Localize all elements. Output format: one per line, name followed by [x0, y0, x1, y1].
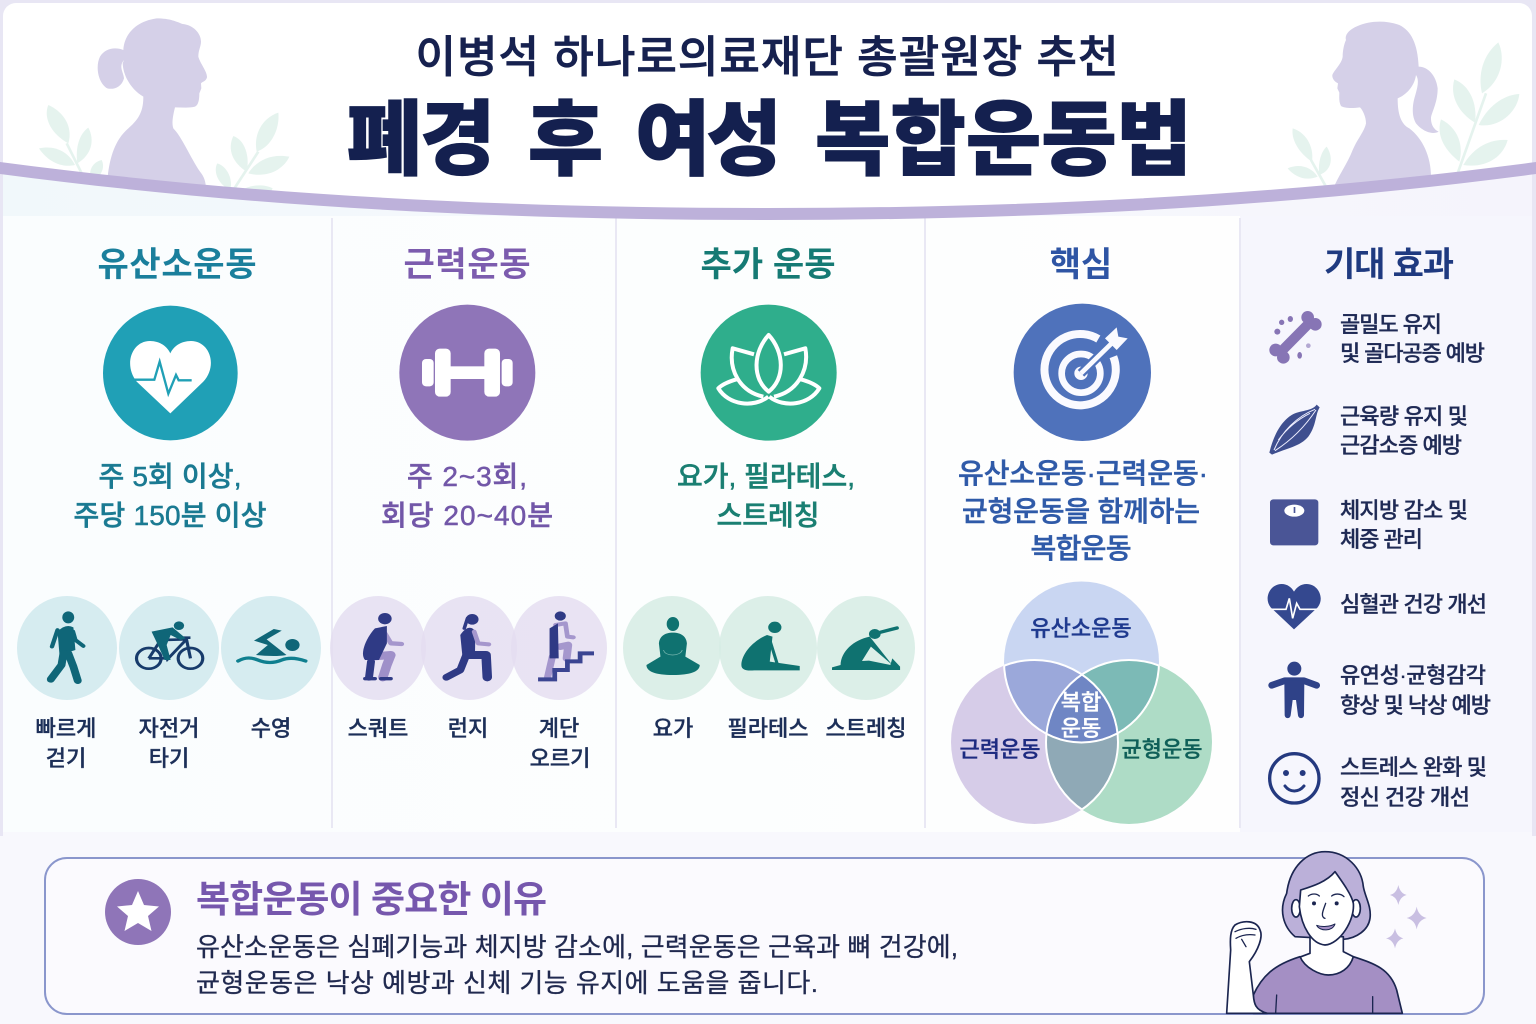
frequency text: [74, 461, 266, 531]
activity: brisk walking: 빠르게: [36, 716, 96, 741]
main title: 여성: [635, 95, 782, 186]
activity: lunge: [446, 614, 489, 741]
activity: brisk walking: [17, 596, 117, 771]
activity: stair climbing: [530, 611, 594, 771]
activity: cycling: 자전거: [139, 716, 199, 741]
venn diagram: [951, 582, 1212, 824]
frequency text: 주 2~3회,: [407, 461, 527, 492]
description text: 유산소운동·근력운동·: [958, 458, 1208, 489]
icon: target with arrow: [1014, 304, 1151, 441]
heading: strength: 근력운동: [404, 246, 530, 284]
venn diagram: 균형운동: [1122, 737, 1202, 762]
effect: muscle mass: 근감소증 예방: [1340, 433, 1462, 458]
effect: balance: 유연성·균형감각: [1340, 663, 1486, 688]
activity: pilates: [728, 622, 808, 741]
main title: 폐경: [346, 95, 496, 186]
callout body: [196, 932, 958, 998]
description text: 균형운동을 함께하는: [962, 496, 1200, 527]
icon: heart with pulse: [103, 306, 238, 440]
activity: stair climbing: 오르기: [530, 746, 590, 771]
activity circles: [623, 596, 915, 700]
icon: dumbbell: [399, 305, 535, 441]
activity: yoga: 요가: [653, 716, 693, 741]
callout body: 유산소운동은 심폐기능과 체지방 감소에, 근력운동은 근육과 뼈 건강에,: [196, 932, 958, 962]
activity: swimming: [221, 596, 321, 741]
activity: stretching: 스트레칭: [826, 716, 906, 741]
activity: swimming: 수영: [251, 716, 291, 741]
venn diagram: 유산소운동: [1030, 616, 1132, 641]
panel: strength exercise: [330, 246, 607, 771]
description text: 요가, 필라테스,: [677, 461, 855, 492]
heading: expected effects: 기대 효과: [1324, 246, 1454, 284]
activity: pilates: 필라테스: [728, 716, 808, 741]
effect: cardiovascular: 심혈관 건강 개선: [1340, 592, 1487, 617]
activity: cycling: [119, 596, 219, 771]
activity: cycling: 타기: [149, 746, 189, 771]
frequency text: [381, 461, 553, 531]
callout heading: 복합운동이 중요한 이유: [196, 879, 547, 920]
activity circles: [330, 596, 607, 700]
activity: squat: 스쿼트: [348, 716, 408, 741]
main title: 후: [528, 95, 603, 186]
icon: star badge: [105, 879, 171, 945]
icon: lotus: [701, 305, 837, 441]
frequency text: 주당 150분 이상: [74, 500, 266, 531]
frequency text: 주 5회 이상,: [98, 461, 242, 492]
callout body: 균형운동은 낙상 예방과 신체 기능 유지에 도움을 줍니다.: [196, 968, 818, 998]
activity: lunge: 런지: [448, 716, 488, 741]
panel: core: [951, 246, 1212, 824]
main title: [346, 95, 1192, 186]
main title: 복합운동법: [815, 95, 1192, 186]
effect: balance: 향상 및 낙상 예방: [1340, 693, 1491, 718]
effect: stress: [1270, 754, 1487, 810]
heading: aerobic: 유산소운동: [98, 246, 256, 284]
effect: cardiovascular: [1268, 584, 1487, 629]
heading: core: 핵심: [1050, 246, 1112, 284]
activity: stair climbing: 계단: [539, 716, 579, 741]
effect: bone density: 골밀도 유지: [1340, 312, 1442, 337]
venn diagram: 근력운동: [960, 737, 1040, 762]
effect: stress: 스트레스 완화 및: [1340, 755, 1487, 780]
panel: aerobic exercise: [17, 246, 321, 771]
venn diagram: 운동: [1061, 716, 1101, 741]
activity: yoga: [646, 617, 700, 741]
description text: 복합운동: [1030, 533, 1132, 564]
effect: muscle mass: 근육량 유지 및: [1340, 404, 1468, 429]
effect: muscle mass: [1269, 404, 1468, 458]
panel: expected effects: [1268, 246, 1491, 810]
callout: why combined exercise matters: [45, 852, 1484, 1014]
effect: balance: [1272, 662, 1491, 718]
effect: body fat: [1270, 498, 1468, 552]
venn diagram: 복합: [1061, 690, 1101, 715]
effect: bone density: 및 골다공증 예방: [1340, 341, 1485, 366]
right woman silhouette with leaves: [1288, 22, 1519, 190]
subtitle: 이병석 하나로의료재단 총괄원장 추천: [416, 33, 1118, 82]
effect: bone density: [1269, 311, 1485, 366]
description text: [958, 458, 1208, 564]
panel: additional exercise: [623, 246, 915, 741]
effect: body fat: 체중 관리: [1340, 527, 1423, 552]
activity: squat: [348, 613, 408, 741]
activity: stretching: [826, 628, 906, 741]
heading: additional: 추가 운동: [700, 246, 836, 284]
callout frame: [45, 858, 1484, 1014]
activity: brisk walking: 걷기: [46, 746, 86, 771]
illustration: smiling woman with raised fist: [1227, 852, 1427, 1013]
effect: body fat: 체지방 감소 및: [1340, 498, 1468, 523]
frequency text: 회당 20~40분: [381, 500, 553, 531]
effect: stress: 정신 건강 개선: [1340, 785, 1470, 810]
description text: [677, 461, 855, 531]
header curved band: [0, 162, 1536, 220]
left woman silhouette with leaves: [39, 18, 289, 193]
description text: 스트레칭: [716, 500, 820, 531]
